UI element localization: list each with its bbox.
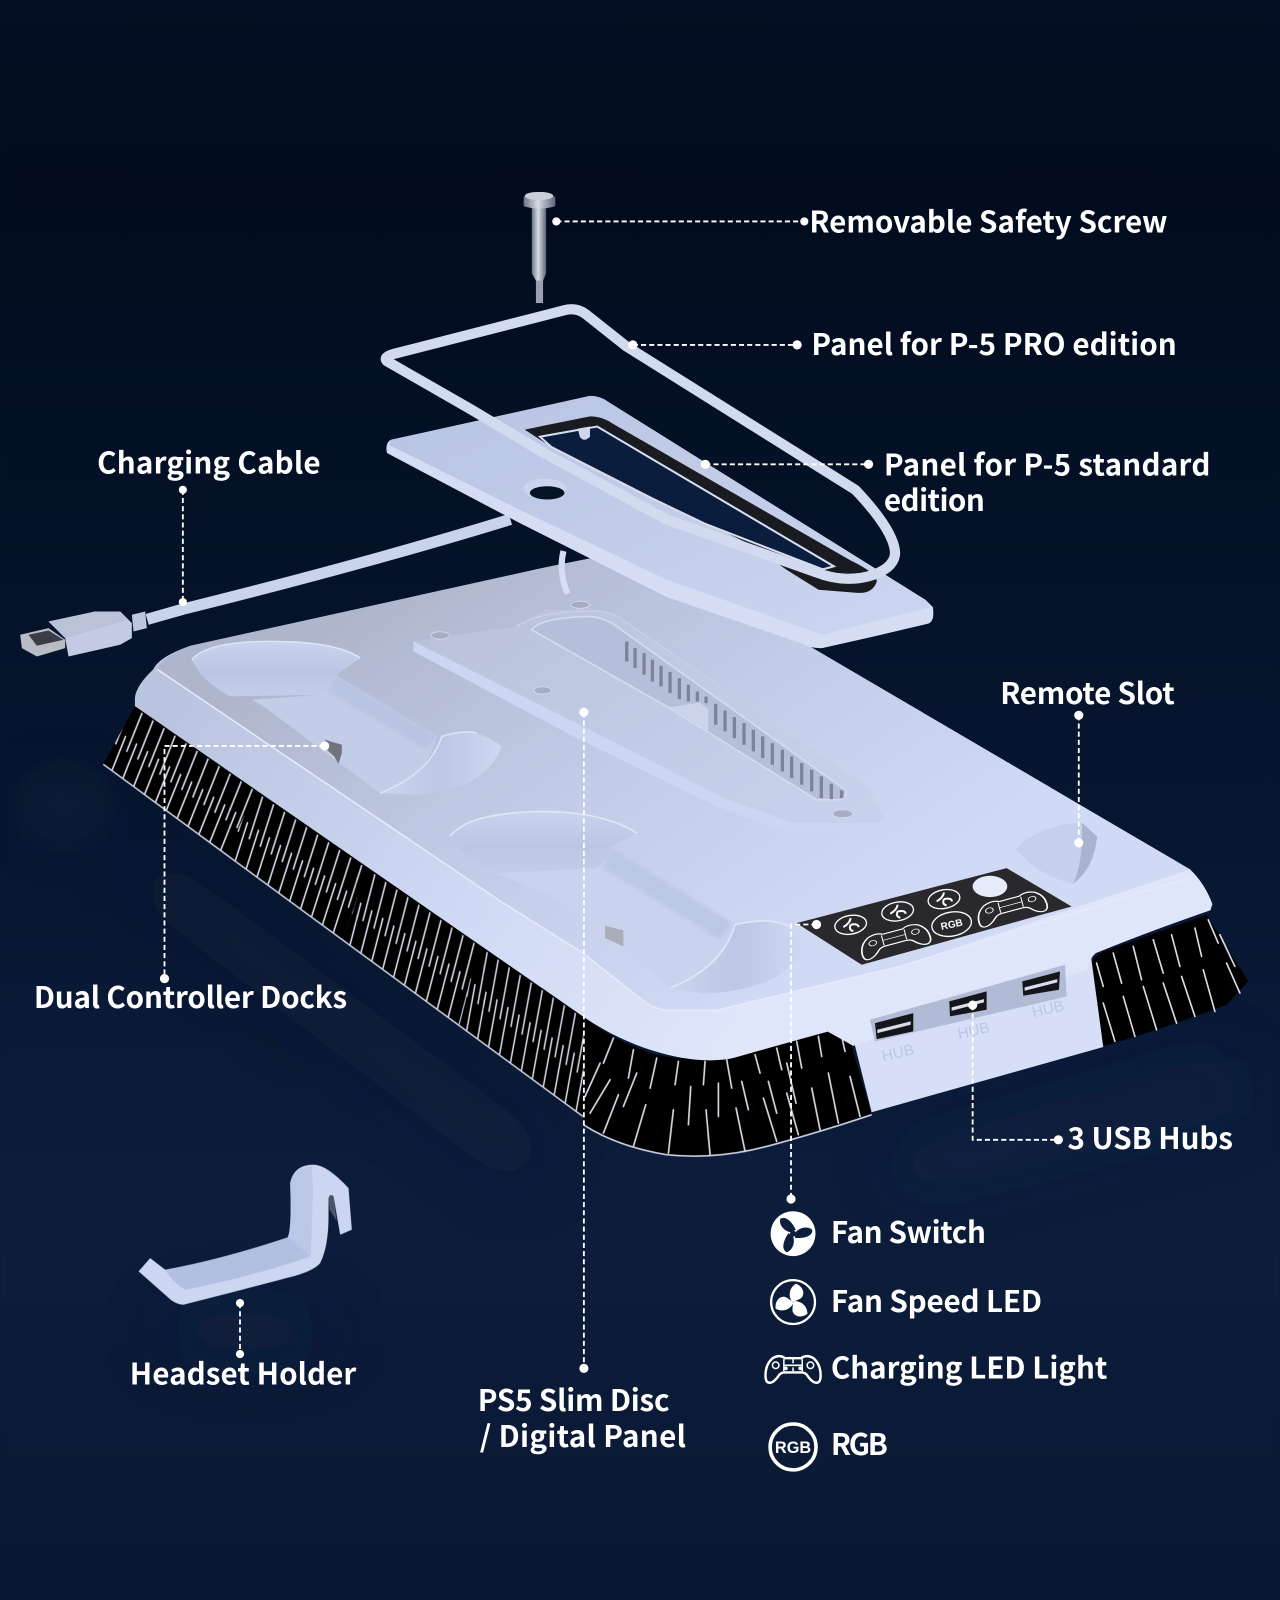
floor reflections <box>33 792 1245 1356</box>
centre latch <box>670 702 708 731</box>
vent mesh right side <box>1088 915 1248 1046</box>
vent mesh front corner <box>583 1016 872 1156</box>
panel underside edge <box>386 396 933 648</box>
base body <box>135 548 1212 1060</box>
leader: safety screw <box>552 217 808 226</box>
leader: slim panel <box>579 708 588 1373</box>
panel top face <box>389 396 931 635</box>
usb plug <box>20 611 147 656</box>
remote slot recess <box>1016 822 1097 884</box>
support post <box>562 551 568 594</box>
HUB embossed labels: HUB <box>1030 997 1066 1021</box>
sticker fan icons <box>833 887 973 939</box>
label: removable safety screw: Removable Safety Screw <box>809 199 1168 242</box>
label: standard panel: Panel for P-5 standard <box>884 442 1210 485</box>
label: remote slot: Remote Slot <box>1000 670 1175 713</box>
base top plate <box>157 548 1190 1010</box>
HUB embossed labels: HUB <box>956 1019 991 1043</box>
legend: fan speed LED: Fan Speed LED <box>831 1278 1042 1321</box>
removable screw <box>524 192 555 303</box>
leader: standard panel <box>701 460 873 469</box>
legend: fan switch: Fan Switch <box>831 1209 986 1252</box>
legend: charging LED light: Charging LED Light <box>831 1345 1107 1388</box>
icon: filled fan <box>771 1211 816 1256</box>
panel for PRO edition frame <box>386 309 895 579</box>
label: slim panel: / Digital Panel <box>480 1413 686 1456</box>
leader: charging cable <box>179 486 187 606</box>
leader: PRO panel <box>628 340 802 349</box>
sticker controller icons <box>858 888 1048 961</box>
legend: RGB: RGB <box>831 1421 888 1464</box>
sticker RGB mark: RGB <box>940 918 964 933</box>
legend: RGB <box>770 1421 888 1470</box>
mounting holes <box>431 601 853 818</box>
label: USB hubs: 3 USB Hubs <box>1068 1115 1233 1158</box>
controller dock two <box>450 811 803 994</box>
holder body <box>139 1165 352 1305</box>
icon: controller <box>766 1356 821 1383</box>
leader: fan controls <box>786 920 821 1204</box>
USB band <box>870 965 1067 1041</box>
fan vent slots <box>627 641 842 799</box>
raised centre platform <box>413 601 885 833</box>
control sticker and USB hubs <box>797 868 1072 1065</box>
charging cable <box>20 519 510 656</box>
platform ridge wall <box>413 641 885 833</box>
platform tray <box>532 616 846 800</box>
label: charging cable: Charging Cable <box>97 439 321 482</box>
screw hole <box>524 479 567 499</box>
leader: USB hubs <box>968 1001 1063 1144</box>
label: headset holder: Headset Holder <box>130 1351 356 1394</box>
window peg <box>578 427 590 440</box>
base outer lip <box>135 548 1212 1060</box>
HUB embossed labels <box>880 997 1066 1065</box>
headset holder <box>139 1165 352 1305</box>
icon: RGB ring: RGB <box>775 1439 811 1457</box>
black slot ring <box>525 416 877 593</box>
label: PRO panel: Panel for P-5 PRO edition <box>811 321 1177 364</box>
panel for standard edition <box>386 396 933 648</box>
base front face <box>853 949 1103 1112</box>
label: dual controller docks: Dual Controller Docks <box>34 974 347 1017</box>
power button <box>973 876 1007 897</box>
USB ports <box>875 971 1060 1039</box>
label: standard panel <box>884 442 1210 520</box>
controller dock one <box>192 641 502 795</box>
leader: controller docks <box>160 741 329 983</box>
label: standard panel: edition <box>884 477 985 520</box>
control sticker <box>797 868 1072 965</box>
HUB embossed labels: HUB <box>880 1041 916 1065</box>
leader: headset holder <box>236 1299 244 1358</box>
icon: outlined fan <box>771 1280 815 1324</box>
vent mesh left side <box>103 706 587 1119</box>
legend: fan switch <box>771 1209 986 1256</box>
label: slim panel: PS5 Slim Disc <box>478 1377 670 1420</box>
window <box>540 427 834 569</box>
leader: remote slot <box>1074 711 1083 847</box>
label: slim panel <box>478 1377 686 1456</box>
